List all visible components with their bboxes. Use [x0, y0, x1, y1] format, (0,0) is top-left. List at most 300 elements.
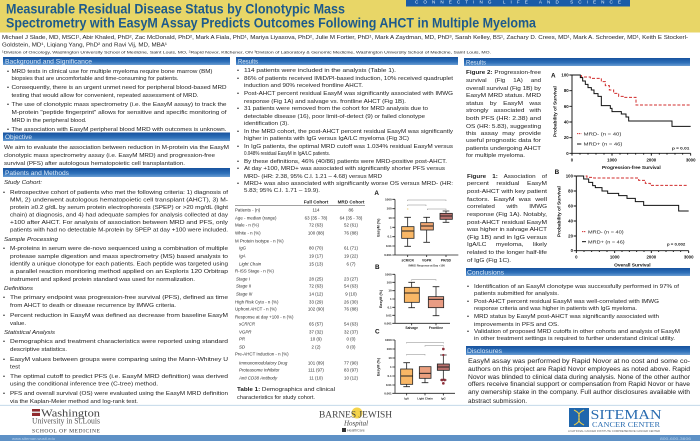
conclusions bullets: improvements in PFS and OS.	[474, 322, 559, 328]
subsection: statistical analysis: via the Kaplan-Meier method and log-rank test.	[10, 399, 138, 405]
chart C: easyM by isotype: 100	[387, 347, 392, 351]
figure 2B: overall survival curve: Probability of Survival	[557, 186, 563, 237]
figure 2 caption: overall survival (Fig 1B) by	[466, 86, 541, 92]
results bullets: 86% of patients received IMiD/PI-based induction, 10% received quadruplet	[244, 76, 453, 82]
figure 1 caption: percent residual EasyM	[467, 181, 547, 187]
logo: barnes-jewish hospital: BARNES JEWISH	[319, 410, 392, 420]
bullets: background: •	[7, 69, 9, 75]
table rows: IgA	[239, 254, 246, 259]
subsection: definitions: from AHCT to death or disease recurrence by IMWG criteria.	[10, 303, 176, 309]
subsection: sample processing: •	[3, 246, 5, 252]
results bullets: MRD- (HR: 2.38, 95% C.I. 1.21 – 4.68) versus MRD	[244, 174, 382, 180]
table rows: 26 (30)	[344, 300, 358, 305]
figure 2B: overall survival curve: 80	[568, 188, 574, 193]
figure 2 caption: useful prognostic data for	[466, 138, 541, 144]
conclusions bullets: •	[467, 299, 469, 305]
bullets: background: •	[7, 127, 9, 133]
table rows: 0 (0)	[346, 337, 356, 342]
results bullets: •	[237, 91, 239, 97]
chart C: easyM by isotype: IgA	[404, 396, 409, 400]
objective text: survival (PFS) after autologous hematopoietic cell transplantation.	[4, 161, 185, 167]
subsection: statistical analysis: descriptive statistics.	[10, 347, 67, 353]
chart B: easyM by transplant setting: EasyM (%)	[379, 289, 383, 308]
figure 2A: progression-free survival curve	[551, 72, 696, 171]
figure 1 caption: correlated with IMWG	[467, 204, 547, 210]
table rows: SD	[239, 345, 246, 350]
conclusions bullets: •	[467, 329, 469, 335]
table rows: 33 (29)	[309, 300, 323, 305]
chart A: easyM by IMWG response: 1	[390, 225, 392, 229]
table rows: 32 (37)	[344, 330, 358, 335]
table rows: 102 (90)	[308, 307, 325, 312]
chart A: easyM by IMWG response: 1000	[385, 197, 392, 201]
bullets: background: MRD tests in clinical use for multiple myeloma require bone marrow (BM)	[12, 69, 213, 75]
figure 2A: progression-free survival curve: 0	[571, 157, 574, 162]
chart A: easyM by IMWG response: 0.001	[384, 253, 392, 257]
panel: patients and methods	[3, 168, 230, 405]
subsection: sample processing: a parallel reaction monitoring method applied on an Exploris 120 Orbitrap	[10, 269, 228, 275]
table rows: 76 (88)	[344, 307, 358, 312]
results bullets: higher in patients with IgG versus IgA/LC myeloma (Fig 3C)	[244, 136, 409, 142]
chart A: easyM by IMWG response: 10	[388, 216, 392, 220]
table caption	[237, 387, 335, 401]
chart A: easyM by IMWG response: 0.01	[386, 244, 392, 248]
logo: siteman cancer center	[568, 408, 662, 433]
conclusions bullets: •	[467, 284, 469, 290]
table rows: 9 (10)	[345, 292, 357, 297]
figure 2A: progression-free survival curve: 1000	[607, 157, 617, 162]
chart B: easyM by transplant setting: Salvage	[405, 326, 418, 330]
subsection: study cohort: Retrospective cohort of patients who met the following criteria: 1) diagnosis of	[10, 190, 228, 196]
disclosures text: EasyM assay was performed by Rapid Novor at no cost and some co-	[468, 358, 690, 365]
figure 2B: overall survival curve: Overall Survival	[614, 263, 651, 269]
panel: results (right column)	[464, 58, 690, 264]
conclusions bullets: Identification of an EasyM clonotype was successfully performed in 97% of	[474, 284, 679, 290]
figure 1 caption: (Fig 1B) and in IgG versus	[467, 235, 547, 241]
subsection: statistical analysis: Statistical Analysis	[4, 330, 55, 336]
conclusions bullets: response criteria and was higher in patients with IgG myeloma.	[474, 306, 637, 312]
table rows: 65 (57)	[309, 322, 323, 327]
results bullets: •	[237, 181, 239, 187]
table rows: IgG	[239, 246, 247, 251]
results bullets: •	[237, 129, 239, 135]
figure 2B: overall survival curve: p = 0.002	[667, 242, 686, 246]
figure 2 caption: for multiple myeloma.	[466, 153, 525, 159]
bullets: background: •	[7, 85, 9, 91]
subsection: sample processing	[3, 237, 228, 283]
subsection: definitions	[3, 286, 228, 327]
subsection: study cohort: Study Cohort:	[4, 180, 42, 186]
subsection: definitions: The primary endpoint was progression-free survival (PFS), defined as time	[10, 295, 228, 301]
figure 1 caption: post-AHCT residual EasyM	[467, 220, 547, 226]
logo: barnes-jewish hospital: HealthCare	[347, 428, 365, 432]
subsection: statistical analysis: EasyM values between groups were comparing using the Mann-Whitney U	[10, 357, 228, 363]
table rows: 28 (25)	[309, 277, 323, 282]
subsection: statistical analysis: PFS and overall survival (OS) were evaluated using the EasyM MRD definition	[10, 391, 228, 397]
results bullets: At day +100, MRD+ was associated with significantly shorter PFS versus	[244, 166, 445, 172]
results bullets: By these definitions, 46% (40/86) patients were MRD-positive post-AHCT.	[244, 159, 447, 165]
figure 2B: overall survival curve: 2000	[647, 254, 657, 259]
logo: barnes-jewish hospital	[319, 408, 392, 432]
figure 2A: progression-free survival curve: Probability of Survival	[553, 86, 559, 137]
panel: results (middle column)	[236, 57, 458, 194]
figure 2B: overall survival curve: 0	[571, 248, 574, 253]
heading: background and significance: Background and Significance	[5, 59, 93, 65]
table rows: 86	[349, 208, 354, 213]
conclusions bullets: Validation of proposed MRD cutoffs in other cohorts and analysis of EasyM	[474, 329, 680, 335]
subsection: statistical analysis: The optimal cutoff to predict PFS (i.e. EasyM MRD definition) was derived	[10, 374, 228, 380]
table rows: 54 (63)	[344, 322, 358, 327]
results bullets: 114 patients were included in the analysis (Table 1).	[244, 68, 396, 74]
chart A: easyM by IMWG response: 100	[387, 207, 392, 211]
conclusions bullets: Post-AHCT percent residual EasyM was well-correlated with IMWG	[474, 299, 659, 305]
results bullets: •	[237, 166, 239, 172]
subsection: statistical analysis: •	[3, 339, 5, 345]
table rows: 54 (63)	[344, 284, 358, 289]
heading: results right: Results	[466, 60, 486, 66]
figure 1 caption: IgA/LC myeloma, likely	[467, 242, 547, 248]
table rows: 72 (63)	[309, 284, 323, 289]
table rows: sCR/CR	[239, 322, 256, 327]
subsection: statistical analysis: •	[3, 374, 5, 380]
table rows: Immunomodulatory Drug	[239, 361, 288, 366]
disclosures text: any ownership stake in the company. Full author disclosures available with	[468, 389, 691, 396]
chart A: easyM by IMWG response: EasyM (%)	[376, 218, 380, 237]
figure 1 caption: Figure 1: Association of	[467, 174, 547, 180]
disclosures text: Novor was blinded to clinical data during analysis. None of the other author	[468, 374, 690, 381]
results bullets: •	[237, 76, 239, 82]
footer band	[0, 435, 700, 441]
objective text: clonotypic mass spectrometry assay (i.e. EasyM MRD) and progression-free	[4, 153, 215, 159]
heading: disclosures: Disclosures	[467, 349, 502, 355]
results bullets: detectable disease (16), poor limit-of-detect (9) or failed clonotype	[244, 114, 425, 120]
subsection: definitions: value.	[10, 321, 26, 327]
authors and affiliations: ¹Division of Oncology, Washington University School of Medicine, Saint Louis, MO, ²Rapid Novor, Kitchener, ON ³Division of Laboratory & Genomic Medicine, Washington University School of Medicine, Saint Louis, MO.	[2, 50, 491, 55]
figure 2B: overall survival curve: MRD+ (n = 46)	[588, 239, 625, 244]
panel: background and significance	[3, 57, 230, 133]
table rows: Proteasome Inhibitor	[239, 368, 280, 373]
figure 1: box plots	[374, 190, 458, 400]
bullets: background: MRD in the peripheral blood.	[12, 118, 87, 124]
subsection: study cohort: +100 after AHCT. For analysis of association between MRD and PFS, only	[10, 220, 228, 226]
figure 2A: progression-free survival curve: MRD- (n = 40)	[584, 132, 622, 137]
subsection: statistical analysis: test	[10, 364, 20, 370]
subsection: study cohort: protein ≥0.2 g/dL by serum protein electrophoresis (SPEP) or >20 mg/dL (light	[10, 205, 228, 211]
results bullets: •	[237, 159, 239, 165]
chart B: easyM by transplant setting: 10	[388, 289, 392, 293]
table rows: 80 (70)	[309, 246, 323, 251]
header band with title	[0, 0, 700, 32]
logo: washington university school of medicine: SCHOOL OF MEDICINE	[32, 428, 101, 434]
table rows: 37 (32)	[309, 330, 323, 335]
figure 2 caption: patients undergoing AHCT	[466, 146, 542, 152]
table rows: 19 (17)	[309, 254, 323, 259]
logo: washington university school of medicine: University in St.Louis	[32, 416, 100, 426]
table rows: 10 (12)	[344, 376, 358, 381]
table rows: Upfront AHCT - n (%)	[235, 307, 277, 312]
table rows: White - n (%)	[235, 231, 261, 236]
figure 2A: progression-free survival curve: A	[551, 72, 556, 79]
table rows: 83 (97)	[344, 368, 358, 373]
results bullets: identification (3).	[244, 121, 289, 127]
figure 2 caption: this assay may provide	[466, 131, 541, 137]
figure 1 caption: post-AHCT with key patient	[467, 189, 547, 195]
authors and affiliations	[2, 35, 688, 55]
table rows: High Risk Cyto - n (%)	[235, 300, 279, 305]
bullets: background: •	[7, 102, 9, 108]
table rows: Age - median (range)	[235, 216, 277, 221]
chart C: easyM by isotype: EasyM (%)	[376, 357, 380, 376]
chart C: easyM by isotype: 0.01	[386, 383, 392, 387]
chart A: easyM by IMWG response	[374, 190, 458, 267]
disclosures text: authors on this project are Rapid Novor employees as noted above. Rapid	[468, 366, 691, 373]
panel: conclusions	[466, 268, 690, 342]
table caption: characteristics for study cohort.	[237, 395, 315, 401]
disclosures text	[468, 358, 691, 405]
table rows: Patients - (n)	[235, 208, 261, 213]
chart B: easyM by transplant setting: 100	[387, 280, 392, 284]
chart B: easyM by transplant setting: B	[375, 264, 380, 271]
subsection: statistical analysis: using the conditional inference tree (C-tree) method.	[10, 382, 158, 388]
footer band: 800-600-3606	[660, 436, 692, 441]
results bullets: 5.83; 95% C.I. 1.71 – 19.9).	[244, 188, 320, 194]
table rows	[235, 208, 363, 381]
table rows: 6 (7)	[346, 262, 356, 267]
results bullets: Post-AHCT percent residual EasyM was significantly associated with IMWG	[244, 91, 453, 97]
title: Spectrometry with EasyM Assay Predicts Outcomes Following AHCT in Multiple Myeloma	[6, 14, 536, 30]
table rows: 64 (35 - 78)	[340, 216, 363, 221]
chart A: easyM by IMWG response: A	[374, 190, 379, 197]
figure 2A: progression-free survival curve: MRD+ (n = 46)	[584, 142, 623, 147]
figure 1 caption: related to the longer half-life	[467, 250, 547, 256]
results bullets: induction and 90% received frontline AHCT.	[244, 83, 363, 89]
table rows: 63 (35 - 78)	[305, 216, 328, 221]
chart B: easyM by transplant setting	[375, 264, 450, 330]
figure 2B: overall survival curve: 20	[568, 233, 574, 238]
subsection: study cohort: chain) at diagnosis, and 4) had adequate samples for analysis collected at day	[10, 212, 228, 218]
chart C: easyM by isotype: C	[375, 328, 380, 335]
table rows: 14 (12)	[309, 292, 323, 297]
bullets: background: biopsies that are uncomfortable and time-consuming for patients.	[12, 76, 179, 82]
figure 2B: overall survival curve: 40	[568, 218, 574, 223]
bullets: background: M-protein "peptide fingerprint" allows for sensitive and specific monitoring of	[12, 110, 227, 116]
results bullets: •	[237, 144, 239, 150]
table rows: M Protein Isotype - n (%)	[235, 239, 284, 244]
subsection: definitions: Definitions	[4, 286, 33, 292]
table rows: 100 (88)	[308, 231, 325, 236]
top banner: connecting life and science	[406, 0, 630, 6]
bullets: background: The use of clonotypic mass spectrometry (i.e. the EasyM assay) to track the	[12, 102, 226, 108]
logo: siteman cancer center: CANCER CENTER	[592, 420, 661, 429]
table rows: VGPR	[239, 330, 252, 335]
chart C: easyM by isotype: 10	[388, 356, 392, 360]
figure 2A: progression-free survival curve: 100	[561, 72, 569, 77]
chart B: easyM by transplant setting: 1	[390, 297, 392, 301]
figure 2A: progression-free survival curve: 40	[564, 119, 569, 124]
subsection: definitions: Percent reduction in EasyM was defined as decrease from baseline EasyM	[10, 313, 228, 319]
chart C: easyM by isotype: 1	[390, 365, 392, 369]
logo: washington university school of medicine: Washington	[41, 408, 100, 420]
chart A: easyM by IMWG response: 0.1	[388, 235, 392, 239]
logo: washington university school of medicine	[32, 408, 101, 434]
title	[6, 0, 536, 30]
table rows: Light Chain	[239, 262, 262, 267]
table rows: Stage I	[236, 277, 251, 282]
results bullets: 31 patients were removed from the cohort for MRD analysis due to	[244, 106, 428, 112]
figure 2A: progression-free survival curve: 20	[564, 135, 569, 140]
table rows: 72 (63)	[309, 223, 323, 228]
figure 2 caption	[466, 70, 542, 159]
figure 2B: overall survival curve: MRD- (n = 40)	[588, 229, 624, 234]
figure 2 caption: strongly associated with	[466, 108, 541, 114]
table rows: 61 (71)	[344, 246, 358, 251]
conclusions bullets: MRD status by EasyM post-AHCT was significantly associated with	[474, 314, 659, 320]
chart B: easyM by transplant setting: 0.01	[386, 313, 392, 317]
objective text: We aim to evaluate the association between reduction in M-protein via the EasyM	[4, 145, 229, 151]
figure 2 caption: EasyM MRD status. MRD	[466, 93, 541, 99]
subsection: sample processing: identify a unique clonotype for each patients. Each peptide was targeted using	[10, 262, 228, 268]
table rows: 0 (0)	[346, 345, 356, 350]
chart A: easyM by IMWG response: sCR/CR	[401, 258, 414, 262]
table header: MRD Cohort	[338, 200, 365, 205]
conclusions bullets: in other treatment settings is required to further understand clinical utility.	[474, 336, 675, 342]
title: Measurable Residual Disease Status by Clonotypic Mass	[6, 0, 345, 16]
results bullets: MRD+ was also associated with significantly worse OS versus MRD- (HR:	[244, 181, 453, 187]
panel: disclosures	[466, 346, 691, 405]
table 1: demographics	[235, 200, 365, 401]
chart C: easyM by isotype: IgG	[441, 396, 446, 400]
table rows: Male - n (%)	[235, 223, 259, 228]
table rows: 11 (10)	[309, 376, 323, 381]
results bullets: response (Fig 1A) and salvage vs. frontline AHCT (Fig 1B).	[244, 99, 406, 105]
bullets: background: The association with EasyM peripheral blood MRD with outcomes is unknown.	[12, 127, 227, 133]
table rows: 111 (97)	[308, 368, 324, 373]
logo: siteman cancer center: A NATIONAL CANCER INSTITUTE COMPREHENSIVE CANCER CENTER	[568, 430, 660, 433]
table rows: Anti CD38 Antibody	[238, 376, 278, 381]
table rows: 114	[312, 208, 320, 213]
subsection: definitions: •	[3, 313, 5, 319]
subsection: sample processing: protease sample digestion and mass spectrometry (MS) based analysis to	[10, 254, 228, 260]
chart A: easyM by IMWG response: IMWG Response at Day +100	[408, 263, 445, 267]
figure 2A: progression-free survival curve: 2000	[647, 157, 657, 162]
table header	[235, 200, 365, 205]
table rows: R-ISS Stage - n (%)	[235, 269, 274, 274]
results bullets: •	[237, 68, 239, 74]
chart B: easyM by transplant setting: 0.001	[384, 321, 392, 325]
chart A: easyM by IMWG response: VGPR	[422, 258, 432, 262]
logo: barnes-jewish hospital: Hospital	[343, 420, 368, 428]
figure 2B: overall survival curve	[555, 169, 694, 269]
subsection: study cohort: •	[3, 190, 5, 196]
table rows: Stage II	[236, 284, 252, 289]
table rows: 23 (27)	[344, 277, 358, 282]
figure 2A: progression-free survival curve: 3000	[686, 157, 696, 162]
table rows: 77 (90)	[344, 361, 358, 366]
results bullets: 0.048% residual EasyM in IgA/LC patients.	[244, 151, 330, 157]
figure 2 caption: OS (HR: 5.83), suggesting	[466, 124, 541, 130]
subsection: statistical analysis	[3, 330, 228, 405]
subsection: statistical analysis: Demographics and treatment characteristics were reported using standard	[10, 339, 228, 345]
heading: conclusions: Conclusions	[467, 270, 504, 276]
subsection: study cohort: patients with had no detectable M-protein by SPEP at day +100 were included.	[10, 228, 228, 234]
figure 2B: overall survival curve: 100	[566, 173, 574, 178]
chart C: easyM by isotype: 1000	[385, 338, 392, 342]
subsection: sample processing: Sample Processing	[4, 237, 59, 243]
figure 2A: progression-free survival curve: Progression-free Survival	[602, 165, 661, 171]
figure 1 caption: response (Fig 1A). Notably,	[467, 212, 547, 218]
chart A: easyM by IMWG response: PR/SD	[441, 258, 452, 262]
figure 2 caption: both PFS (HR: 2.38) and	[466, 116, 541, 122]
table rows: 76 (88)	[344, 231, 358, 236]
chart C: easyM by isotype: 0.1	[388, 374, 392, 378]
conclusions bullets	[467, 284, 680, 342]
figure 2 caption: status by EasyM was	[466, 101, 541, 107]
chart B: easyM by transplant setting: 1000	[385, 272, 392, 276]
results bullets: •	[237, 106, 239, 112]
figure 2A: progression-free survival curve: p = 0.01	[672, 146, 690, 150]
subsection: statistical analysis: •	[3, 357, 5, 363]
figure 1 caption	[466, 174, 548, 264]
bullets: background	[7, 69, 227, 133]
disclosures text: offers receive financial support or compensation from Rapid Novor or have	[468, 381, 691, 388]
figure 1 caption: factors. EasyM was well	[467, 197, 547, 203]
table rows: Response at day +100 - n (%)	[235, 315, 294, 320]
authors and affiliations: Goldstein, MD¹, Liqiang Yang, PhD² and Ravi Vij, MD, MBA¹	[2, 42, 167, 48]
chart B: easyM by transplant setting: 0.1	[388, 305, 392, 309]
heading: results: Results	[238, 60, 258, 66]
subsection: statistical analysis: •	[3, 391, 5, 397]
heading: patients and methods: Patients and Methods	[5, 171, 69, 177]
table caption: Table 1: Demographics and clinical	[237, 387, 335, 393]
figure 2B: overall survival curve: 3000	[684, 254, 694, 259]
table rows: 19 (22)	[344, 254, 358, 259]
results bullets: In IgG patients, the optimal MRD cutoff was 1.034% residual EasyM versus	[244, 144, 453, 150]
figure 2A: progression-free survival curve: 0	[566, 151, 569, 156]
table rows: Pre-AHCT Induction - n (%)	[235, 352, 289, 357]
logo: siteman cancer center: SITEMAN	[590, 408, 662, 423]
table rows: 15 (13)	[309, 262, 323, 267]
authors and affiliations: Michael J Slade, MD, MSCI¹, Abir Khaled, PhD², Zac McDonald, PhD², Mark A Fiala, PhD¹, Mariya Liyasova, PhD², Julie M Fortier, PhD¹, Mark A Zaydman, MD, PhD³, Sarah Kelley, BS¹, Zachary D. Crees, MD¹, Mark A. Schroeder, MD¹, Keith E Stockerl-	[2, 35, 688, 41]
figure 2B: overall survival curve: 0	[575, 254, 578, 259]
footer band: www.siteman.wustl.edu	[12, 436, 55, 441]
table rows: PR	[239, 337, 246, 342]
subsection: study cohort	[3, 180, 228, 234]
heading: objective: Objective	[5, 135, 33, 141]
objective text	[4, 145, 229, 167]
table rows: 10 (9)	[310, 337, 322, 342]
chart C: easyM by isotype	[375, 328, 455, 400]
disclosures text: abstract submission.	[468, 398, 527, 405]
subsection: sample processing: instrument and spiked protein standard was used for normalization.	[10, 277, 195, 283]
figure 2A: progression-free survival curve: 80	[564, 88, 569, 93]
subsection: study cohort: MM, 2) underwent autologous hematopoietic cell transplant (AHCT), 3) M-	[10, 198, 228, 204]
table rows: 52 (61)	[344, 223, 358, 228]
results bullets	[237, 68, 453, 194]
figure 2B: overall survival curve: 60	[568, 203, 574, 208]
figure 2B: overall survival curve: B	[555, 169, 560, 176]
bullets: background: Consequently, there is an urgent unmet need for peripheral blood-based MRD	[12, 85, 227, 91]
chart B: easyM by transplant setting: Frontline	[429, 326, 443, 330]
subsection: sample processing: M-proteins in serum were de-novo sequenced using a combination of multiple	[10, 246, 228, 252]
results bullets: In the MRD cohort, the post-AHCT percent residual EasyM was significantly	[244, 129, 453, 135]
subsection: definitions: •	[3, 295, 5, 301]
figure 2 caption: Figure 2: Progression-free	[466, 70, 541, 76]
figure 1 caption: of IgG (Fig 1C).	[467, 258, 511, 264]
chart C: easyM by isotype: Light Chain	[417, 396, 433, 400]
table rows: Stage III	[236, 292, 253, 297]
conclusions bullets: •	[467, 314, 469, 320]
figure 2A: progression-free survival curve: 60	[564, 104, 569, 109]
